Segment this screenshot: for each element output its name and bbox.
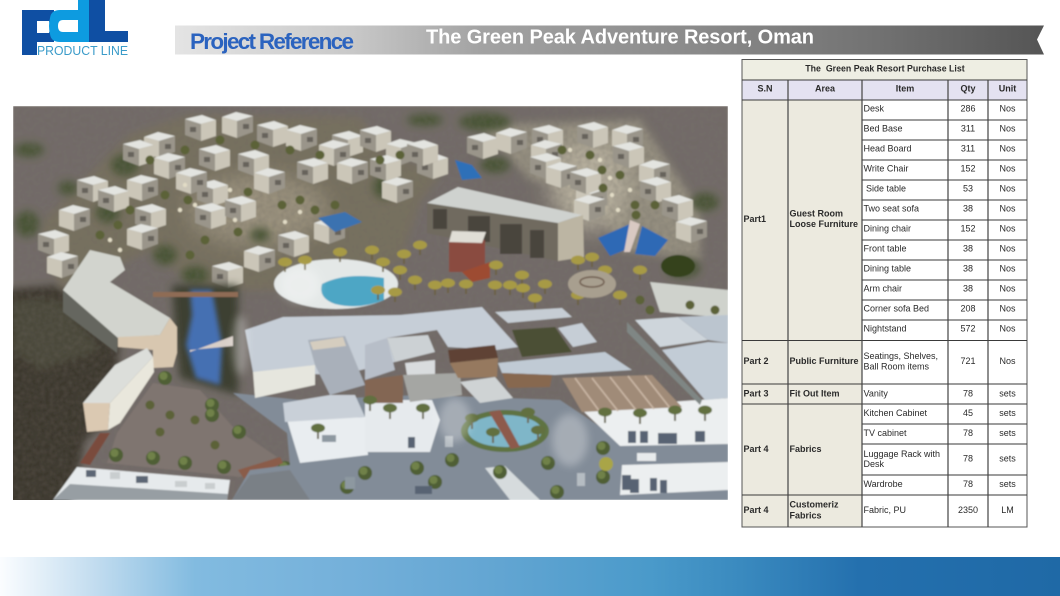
quantities: 78 [963, 454, 973, 464]
purchase list table [742, 59, 1028, 528]
part and area labels: Fabrics [790, 444, 822, 454]
quantities: 45 [963, 408, 973, 418]
item names: Side table [866, 184, 906, 194]
item names: Two seat sofa [864, 204, 919, 214]
item names: Desk [864, 459, 885, 469]
table title: The Green Peak Resort Purchase List [805, 64, 965, 74]
palms and car details [311, 396, 712, 499]
part and area labels: Fit Out Item [790, 388, 840, 398]
item names: Vanity [864, 388, 888, 398]
part and area labels [744, 208, 859, 520]
part and area labels: Part 4 [744, 444, 769, 454]
item names: Dining chair [864, 224, 911, 234]
table grid [742, 60, 1027, 527]
central complex [245, 307, 682, 422]
part and area labels: Part1 [744, 214, 766, 224]
quantities: 311 [961, 124, 975, 134]
resort aerial rendering [13, 106, 728, 500]
right building [627, 315, 728, 405]
item names: Arm chair [864, 284, 902, 294]
project title: The Green Peak Adventure Resort, Oman [426, 26, 814, 48]
part and area labels: Customeriz [790, 500, 839, 510]
column headers [757, 84, 1016, 94]
units: Nos [999, 244, 1016, 254]
column headers: Unit [999, 84, 1016, 94]
logo: PDL Product Line [22, 0, 128, 58]
soft light glows [232, 267, 588, 466]
quantities: 152 [960, 224, 976, 234]
dark hillside lower left [0, 285, 120, 510]
part and area labels: Fabrics [790, 510, 822, 520]
gravel planting bed [107, 383, 277, 477]
item names: Kitchen Cabinet [864, 408, 928, 418]
units: Nos [999, 324, 1016, 334]
parking and roads [232, 393, 728, 500]
units: sets [999, 454, 1016, 464]
quantities [958, 104, 978, 515]
quantities: 208 [960, 304, 976, 314]
units: sets [999, 479, 1016, 489]
units: Nos [999, 356, 1016, 366]
item names: Fabric, PU [864, 505, 906, 515]
item names: TV cabinet [864, 428, 907, 438]
item names: Desk [864, 104, 885, 114]
quantities: 78 [963, 388, 973, 398]
item names: Bed Base [864, 124, 903, 134]
lower-left parking [53, 467, 230, 500]
column headers: Qty [960, 84, 976, 94]
quantities: 53 [963, 184, 973, 194]
logo: PDL Product Line: PRODUCT LINE [37, 44, 128, 58]
quantities: 721 [960, 356, 976, 366]
units: Nos [999, 164, 1016, 174]
units: Nos [999, 124, 1016, 134]
column headers: S.N [757, 84, 773, 94]
units: Nos [999, 304, 1016, 314]
part and area labels: Part 3 [744, 388, 769, 398]
units: sets [999, 408, 1016, 418]
item names: Nightstand [864, 324, 907, 334]
item names: Head Board [864, 144, 912, 154]
units: Nos [999, 104, 1016, 114]
quantities: 311 [961, 144, 975, 154]
column headers: Area [815, 84, 836, 94]
item names: Luggage Rack with [864, 449, 940, 459]
quantities: 38 [963, 284, 973, 294]
part and area labels: Part 4 [744, 505, 769, 515]
quantities: 38 [963, 204, 973, 214]
column headers: Item [896, 84, 914, 94]
item names: Front table [864, 244, 907, 254]
item names: Seatings, Shelves, [864, 351, 938, 361]
header ribbon [175, 26, 1044, 54]
footer gradient band [0, 557, 1060, 596]
hotel block [427, 187, 584, 261]
quantities: 2350 [958, 505, 978, 515]
quantities: 572 [960, 324, 976, 334]
units: sets [999, 428, 1016, 438]
part and area labels: Loose Furniture [790, 219, 858, 229]
units: sets [999, 388, 1016, 398]
item names: Dining table [864, 264, 911, 274]
quantities: 152 [960, 164, 976, 174]
quantities: 78 [963, 428, 973, 438]
village ground [40, 115, 440, 290]
red pavilion [449, 231, 490, 282]
yellow palm trees [278, 240, 647, 308]
units [999, 104, 1016, 515]
item names: Corner sofa Bed [864, 304, 929, 314]
lagoon pool [274, 259, 398, 309]
units: Nos [999, 144, 1016, 154]
village planting and lights [96, 136, 660, 260]
units: Nos [999, 204, 1016, 214]
units: LM [1001, 505, 1014, 515]
quantities: 38 [963, 244, 973, 254]
part and area labels: Part 2 [744, 356, 769, 366]
item names: Wardrobe [864, 479, 903, 489]
part and area labels: Public Furniture [790, 356, 859, 366]
units: Nos [999, 184, 1016, 194]
villa water features [318, 160, 668, 256]
mottled terrain texture [13, 106, 728, 500]
entrance pond [461, 410, 549, 452]
quantities: 78 [963, 479, 973, 489]
stream and bridges [153, 285, 238, 395]
quantities: 38 [963, 264, 973, 274]
item names [864, 104, 940, 515]
units: Nos [999, 284, 1016, 294]
section label: Project Reference [190, 29, 354, 54]
part and area labels: Guest Room [790, 208, 843, 218]
item names: Ball Room items [864, 362, 930, 372]
quantities: 286 [960, 104, 976, 114]
shrubs [14, 113, 719, 284]
table fills [742, 60, 1027, 527]
villas [38, 112, 707, 288]
units: Nos [999, 224, 1016, 234]
left guest wing [63, 250, 177, 432]
item names: Write Chair [864, 164, 908, 174]
units: Nos [999, 264, 1016, 274]
